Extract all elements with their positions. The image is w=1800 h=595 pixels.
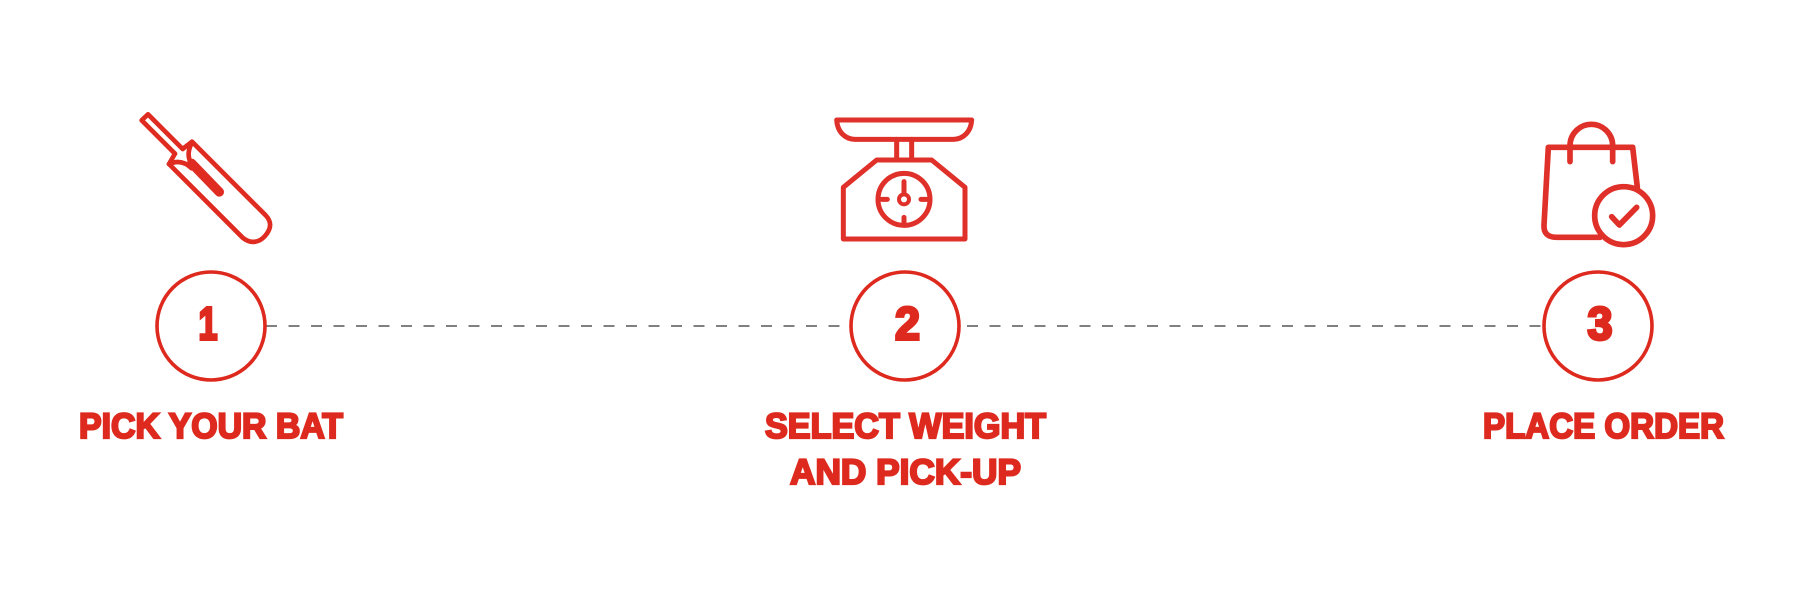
step number 2: 2 [895, 298, 920, 350]
icon: shopping bag with check [1544, 124, 1653, 245]
label: place order: PLACE ORDER [1483, 406, 1724, 446]
step number circle 1 [157, 272, 265, 380]
label: select weight and pick-up: AND PICK-UP [790, 452, 1021, 492]
label: select weight and pick-up [765, 406, 1046, 492]
step number 3: 3 [1588, 298, 1612, 350]
icon: kitchen scale [837, 120, 972, 239]
panel: step 2 select weight and pick-up [765, 120, 1046, 492]
step number 1: 1 [198, 298, 218, 350]
icon: cricket bat [142, 114, 270, 242]
label: select weight and pick-up: SELECT WEIGHT [765, 406, 1046, 446]
step number circle 2 [851, 272, 959, 380]
label: pick your bat: PICK YOUR BAT [79, 406, 343, 446]
step number circle 3 [1544, 272, 1652, 380]
panel: step 1 pick your bat [79, 114, 343, 446]
panel: step 3 place order [1483, 124, 1724, 446]
